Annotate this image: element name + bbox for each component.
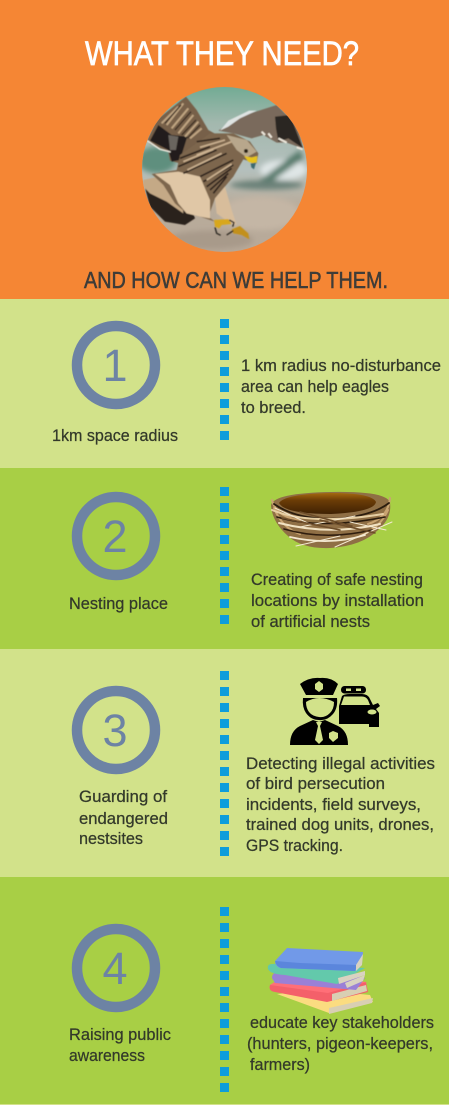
description 2: locations by installation	[251, 591, 424, 610]
label: raising public awareness: awareness	[69, 1046, 145, 1065]
panel: step 3	[0, 649, 449, 877]
description 4: educate key stakeholders	[250, 1013, 434, 1032]
far wing	[218, 105, 303, 149]
label: raising public awareness: Raising public	[69, 1025, 171, 1044]
description 4: farmers)	[250, 1055, 310, 1074]
label: raising public awareness	[69, 1025, 171, 1065]
description 2: of artificial nests	[251, 612, 370, 631]
description 4	[247, 1013, 434, 1074]
talons	[214, 219, 232, 228]
description 1: to breed.	[241, 398, 306, 417]
tail	[143, 178, 195, 225]
number badge 4	[77, 929, 155, 1007]
label: guarding of endangered nestsites: endangered	[79, 809, 168, 828]
description 3	[246, 754, 435, 855]
photo: eagle in flight	[137, 87, 307, 252]
dotted divider 1	[220, 319, 229, 440]
description 3: incidents, field surveys,	[246, 795, 421, 814]
number badge 3	[77, 691, 155, 769]
description 2	[251, 570, 424, 631]
dotted divider 2	[220, 487, 229, 624]
description 3: of bird persecution	[246, 774, 385, 793]
description 3: Detecting illegal activities	[246, 754, 435, 773]
description 1	[241, 356, 441, 417]
label: guarding of endangered nestsites: Guarding of	[79, 787, 167, 806]
number badge 1: 1	[102, 340, 128, 391]
description 2: Creating of safe nesting	[251, 570, 423, 589]
number badge 2	[77, 497, 155, 575]
number badge 4: 4	[102, 943, 128, 994]
dotted divider 4	[220, 907, 229, 1092]
number badge 2: 2	[102, 511, 128, 562]
icon: police officer and car	[290, 678, 380, 745]
icon: stack of books	[268, 948, 373, 1014]
number badge 1	[77, 326, 155, 404]
near wing	[148, 96, 214, 164]
description 3: GPS tracking.	[246, 836, 343, 855]
panel: step 1	[0, 299, 449, 468]
title: WHAT THEY NEED?	[85, 35, 359, 73]
label: guarding of endangered nestsites: nestsites	[79, 829, 143, 848]
panel: header	[0, 0, 449, 299]
far leg	[215, 187, 237, 225]
body	[152, 133, 258, 222]
dotted divider 3	[220, 671, 229, 856]
label: 1km space radius: 1km space radius	[52, 426, 178, 445]
subtitle: AND HOW CAN WE HELP THEM.	[84, 267, 388, 293]
label: nesting place: Nesting place	[69, 594, 168, 613]
panel: step 4	[0, 877, 449, 1105]
head	[244, 149, 248, 153]
panel: step 2	[0, 468, 449, 649]
label: guarding of endangered nestsites	[79, 787, 168, 848]
description 4: (hunters, pigeon-keepers,	[247, 1034, 433, 1053]
description 1: 1 km radius no-disturbance	[241, 356, 441, 375]
description 1: area can help eagles	[241, 377, 389, 396]
description 3: trained dog units, drones,	[246, 815, 434, 834]
number badge 3: 3	[102, 705, 128, 756]
icon: nest	[271, 492, 392, 548]
